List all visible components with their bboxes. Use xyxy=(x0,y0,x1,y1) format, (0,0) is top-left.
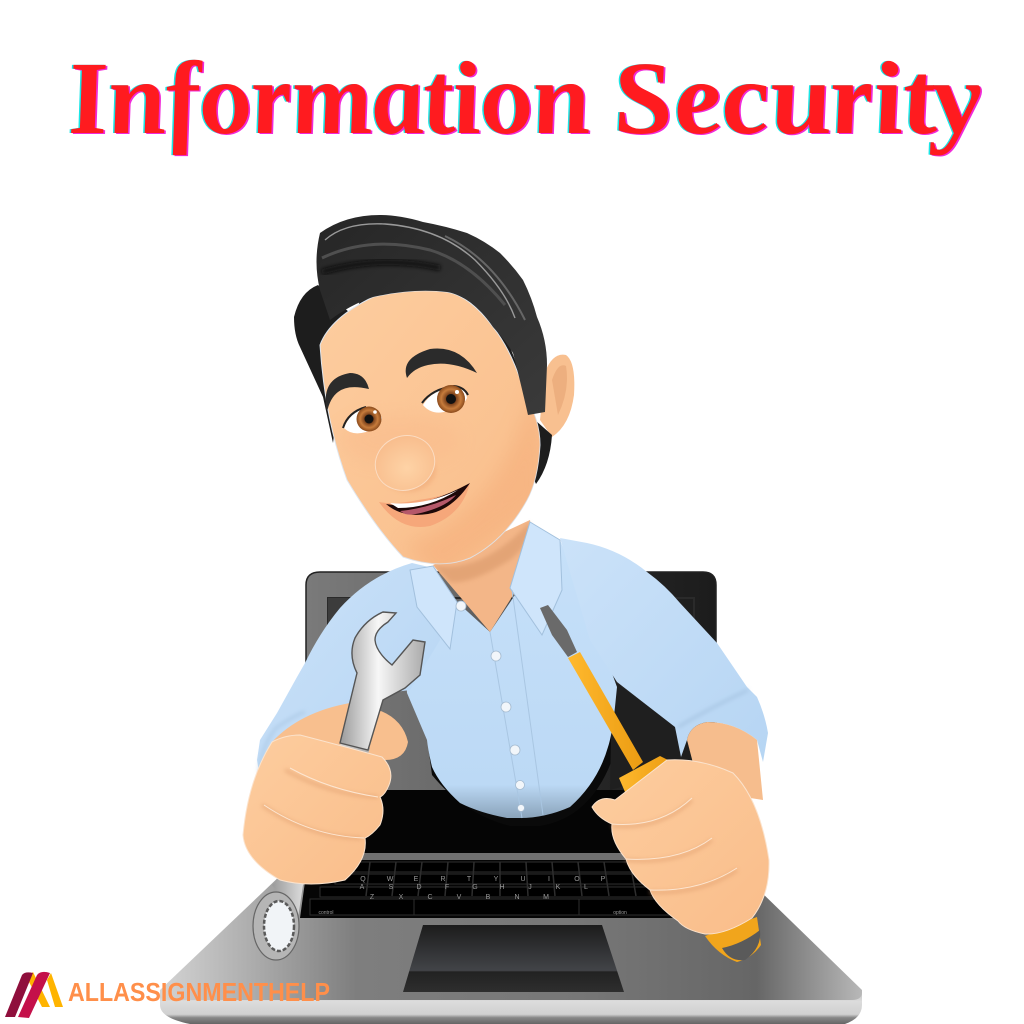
right eyebrow xyxy=(406,348,477,378)
keyboard: K xyxy=(556,884,561,891)
keyboard: X xyxy=(399,894,404,901)
keyboard: N xyxy=(514,894,520,901)
title: Security xyxy=(604,40,990,156)
keyboard: G xyxy=(472,884,478,891)
hair back xyxy=(294,285,552,484)
keyboard xyxy=(300,860,684,918)
keyboard: option xyxy=(613,910,627,916)
keyboard: H xyxy=(499,884,505,891)
keyboard: Y xyxy=(494,876,499,883)
keyboard: C xyxy=(427,894,433,901)
keyboard: D xyxy=(416,884,422,891)
logo mark xyxy=(5,972,63,1018)
keyboard: U xyxy=(520,876,526,883)
left eye xyxy=(343,406,382,433)
title: Security xyxy=(603,40,989,156)
laptop xyxy=(160,572,862,1024)
keyboard: control xyxy=(318,910,334,916)
keyboard: T xyxy=(467,876,472,883)
keyboard: W xyxy=(387,876,394,883)
logo wordmark: ALLASSIGNMENTHELP xyxy=(68,977,330,1007)
keyboard: F xyxy=(445,884,449,891)
right eye xyxy=(422,385,468,413)
right hand xyxy=(592,760,769,934)
hair top xyxy=(316,215,547,415)
keyboard: E xyxy=(414,876,419,883)
laptop screen xyxy=(306,572,716,852)
title: Information xyxy=(56,40,596,156)
face shading xyxy=(334,414,540,564)
collar xyxy=(410,522,562,649)
keyboard: S xyxy=(389,884,394,891)
neck xyxy=(433,520,535,632)
keyboard: R xyxy=(440,876,446,883)
shirt placket and buttons xyxy=(456,590,543,818)
keyboard: L xyxy=(584,884,588,891)
keyboard: Q xyxy=(360,876,366,883)
keyboard: O xyxy=(574,876,580,883)
left hand back and thumb xyxy=(272,703,408,768)
laptop front edge xyxy=(160,992,862,1024)
title: Information xyxy=(59,41,599,157)
title xyxy=(56,40,992,157)
left fist fingers xyxy=(243,735,391,884)
face xyxy=(320,291,540,564)
keyboard: I xyxy=(548,876,550,883)
mouth xyxy=(379,483,470,527)
keyboard: A xyxy=(360,884,365,891)
keyboard: P xyxy=(601,876,606,883)
keyboard: V xyxy=(457,894,462,901)
ear xyxy=(540,355,574,437)
torso shirt xyxy=(400,540,617,818)
wrench xyxy=(253,612,425,960)
laptop base deck xyxy=(160,852,862,1000)
right sleeve xyxy=(560,538,768,762)
keyboard: M xyxy=(543,894,549,901)
keyboard: B xyxy=(486,894,491,901)
left eyebrow xyxy=(326,373,369,412)
title: Information xyxy=(57,40,597,156)
screwdriver xyxy=(540,605,761,962)
keyboard: J xyxy=(528,884,532,891)
left sleeve xyxy=(257,563,440,772)
dark recess behind right arm xyxy=(610,680,682,790)
man xyxy=(243,215,769,962)
title: Security xyxy=(606,41,992,157)
logo: AllAssignmentHelp xyxy=(5,972,330,1018)
keyboard: Z xyxy=(370,894,375,901)
belt shadow around torso xyxy=(428,730,612,826)
nose xyxy=(368,427,442,499)
right forearm xyxy=(687,722,763,800)
touchpad xyxy=(403,925,624,992)
